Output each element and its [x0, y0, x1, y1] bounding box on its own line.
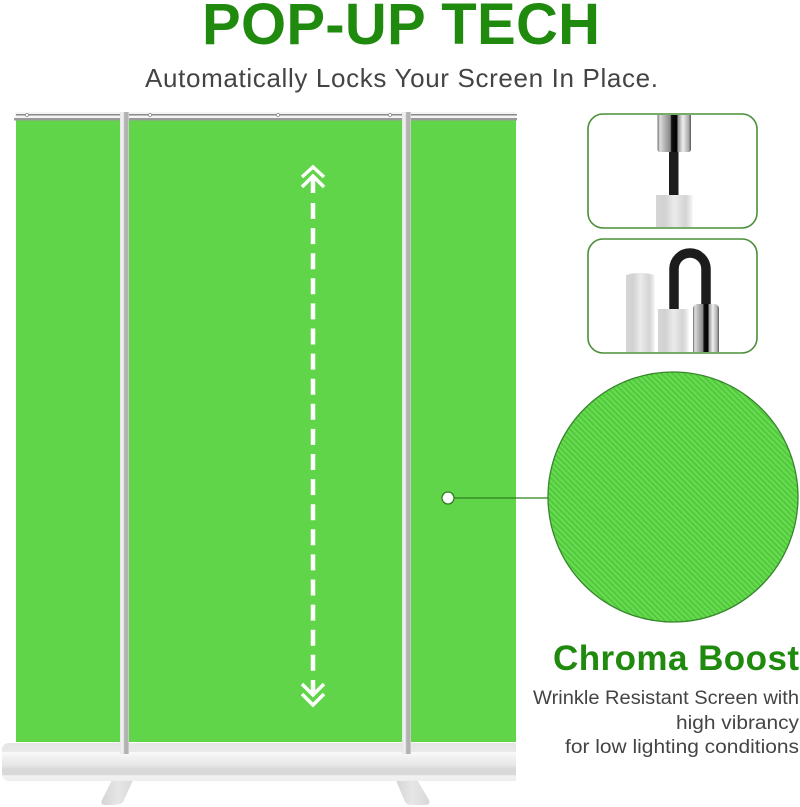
arrow: vertical pop-up direction [302, 167, 324, 705]
telescopic pole left [120, 112, 129, 754]
lower tube [656, 195, 693, 227]
top rail [14, 112, 517, 120]
arrowhead up [302, 167, 324, 193]
chrome cap [693, 304, 719, 352]
text block: chroma boost description: high vibrancy [676, 713, 800, 734]
foot right [395, 778, 430, 805]
elastic cord [669, 150, 678, 197]
heading: chroma boost: Chroma Boost [553, 639, 799, 678]
base [2, 743, 516, 781]
detail box: cord extended [588, 114, 757, 228]
pop-up banner stand [2, 112, 517, 805]
foot left [101, 778, 134, 805]
subtitle: Automatically Locks Your Screen In Place. [145, 63, 658, 93]
green screen panels [16, 120, 516, 742]
tube left [626, 273, 655, 352]
fabric circle [548, 372, 798, 622]
telescopic pole right [402, 112, 411, 754]
connector line [454, 497, 548, 499]
box outline [588, 114, 757, 228]
text block: chroma boost description [533, 688, 800, 758]
box outline [588, 239, 757, 353]
chrome cap [658, 115, 691, 152]
callout: fabric texture [442, 372, 798, 622]
marker dot [442, 492, 454, 504]
dashed line [311, 203, 315, 672]
tube middle [658, 309, 689, 352]
text block: chroma boost description: for low lighting conditions [565, 737, 799, 758]
detail box: cord locked [588, 239, 757, 353]
text block: chroma boost description: Wrinkle Resistant Screen with [533, 688, 799, 709]
elastic cord loop [674, 253, 706, 310]
arrowhead down [302, 680, 324, 705]
